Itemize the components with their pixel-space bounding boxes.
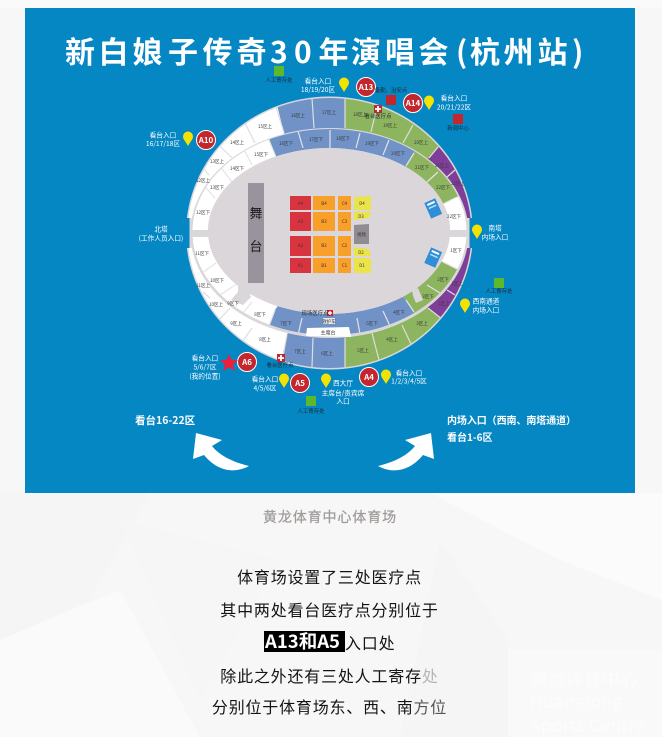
medical points <box>267 105 392 369</box>
watermark: 黄龙体育中心 <box>530 666 638 692</box>
stage <box>248 183 264 283</box>
floor seating blocks: A3 <box>298 219 304 225</box>
entrance labels: 看台入口 <box>305 76 331 86</box>
section labels: 7区下 <box>280 321 292 327</box>
entrance labels: 西大厅 <box>333 378 353 388</box>
floor seating blocks: B2 <box>321 243 327 249</box>
section labels: 18区下 <box>336 136 350 142</box>
entrance labels: (工作人员入口) <box>139 232 183 242</box>
icon: blue stands top <box>424 198 442 219</box>
section labels: 2区下 <box>437 277 449 283</box>
section labels: 20区上 <box>414 139 428 146</box>
section labels: 15区下 <box>254 152 268 158</box>
entrance labels: 看台入口 <box>441 92 467 102</box>
section labels: 16区下 <box>279 141 293 147</box>
floor seating blocks: A1 <box>298 263 304 269</box>
section labels: 21区下 <box>415 165 429 171</box>
section labels: 8区上 <box>259 336 271 343</box>
entrance labels: 入口 <box>336 396 350 406</box>
entrance labels: 18/19/20区 <box>301 84 335 94</box>
section labels: 6区上 <box>321 350 333 357</box>
callout: right <box>447 412 576 444</box>
body text: 入口处 <box>345 630 395 654</box>
section labels: 13区上 <box>210 158 224 165</box>
entrance labels: 1/2/3/4/5区 <box>391 376 427 386</box>
body text <box>212 564 447 718</box>
floor seating blocks: A4 <box>298 201 304 207</box>
service points <box>375 86 469 132</box>
floor seating blocks: 视频 <box>357 231 366 238</box>
entrance labels: 看台入口 <box>396 368 422 378</box>
entrance badges: A13 <box>358 82 374 93</box>
entrance labels: 看台入口 <box>192 352 218 362</box>
floor seating blocks: D1 <box>359 263 365 269</box>
section labels: 1区下 <box>450 248 462 254</box>
section labels: 3区下 <box>422 294 434 300</box>
section labels: 9区下 <box>227 301 239 307</box>
body text: A13和A5 <box>264 628 340 654</box>
section labels: 14区上 <box>230 139 244 146</box>
floor seating blocks: A2 <box>298 243 304 249</box>
section labels: 4区下 <box>393 310 405 316</box>
entrance labels: 南塔 <box>488 222 502 232</box>
section labels: 5区上 <box>357 347 369 354</box>
floor seating blocks: C4 <box>342 201 348 207</box>
section labels: 22区上 <box>451 180 465 187</box>
title: 新白娘子传奇30年演唱会(杭州站) <box>65 28 583 72</box>
body text: 其中两处看台医疗点分别位于 <box>220 597 439 621</box>
service points: 新闻中心 <box>447 124 469 132</box>
watermark: Huanglong <box>530 688 622 714</box>
entrance labels: 20/21/22区 <box>437 102 471 112</box>
entrance labels: 北塔 <box>154 224 168 234</box>
section labels: 5区下 <box>366 321 378 327</box>
section labels: 13区下 <box>210 185 224 191</box>
section labels: 11区下 <box>195 251 209 257</box>
entrance labels: 主席台/贵宾席 <box>322 388 365 398</box>
entrance labels: 4/5/6区 <box>253 382 277 392</box>
entrance labels: (我的位置) <box>189 370 221 380</box>
section labels: 9区上 <box>230 320 242 327</box>
upper tier <box>188 98 471 368</box>
stage: 舞 <box>249 203 263 222</box>
main stand: 主席台 <box>320 330 336 336</box>
medical points: 救护车 <box>322 318 336 325</box>
section labels: 12区上 <box>196 177 210 184</box>
section labels: 2区上 <box>438 300 450 307</box>
section labels: 19区上 <box>383 122 397 129</box>
stage: 台 <box>249 236 263 255</box>
entrance labels: 内场入口 <box>482 232 508 242</box>
main stand <box>306 327 351 337</box>
section labels: 1区上 <box>451 280 463 287</box>
floor seating blocks: B1 <box>321 263 327 269</box>
lower tier <box>192 129 466 334</box>
storage points: 人工寄存处 <box>298 407 325 415</box>
section labels: 15区上 <box>258 123 272 130</box>
section labels: 4区上 <box>386 336 398 343</box>
section labels: 10区下 <box>210 278 224 284</box>
callout: left: 看台16-22区 <box>135 413 196 428</box>
floor seating blocks: C1 <box>342 263 348 269</box>
callout: right: 内场入口（西南、南塔通道） <box>447 412 576 427</box>
section labels: 19区下 <box>365 141 379 147</box>
callout: right: 看台1-6区 <box>447 429 492 444</box>
medical points: 看台医疗点 <box>365 112 392 120</box>
stadium seating plan <box>186 96 472 370</box>
entrance badges: A10 <box>198 135 214 146</box>
panel: stadium map <box>25 8 635 493</box>
section labels: 10区上 <box>209 301 223 308</box>
section labels: 3区上 <box>416 320 428 327</box>
arrow: left <box>193 433 249 470</box>
floor seating blocks <box>290 196 371 273</box>
medical points: 现场医疗点 <box>302 309 329 317</box>
floor seating blocks: B4 <box>321 201 327 207</box>
section labels: 16区上 <box>291 112 305 119</box>
entrance badges <box>196 78 422 392</box>
section labels: 22区下 <box>436 185 450 191</box>
body text: 分别位于体育场东、西、南方位 <box>212 694 447 718</box>
entrance labels: 16/17/18区 <box>146 138 180 148</box>
section labels: 12区下 <box>196 210 210 216</box>
entrance badges: A14 <box>405 98 421 109</box>
section labels: 17区上 <box>322 109 336 116</box>
section labels: 8区下 <box>254 312 266 318</box>
floor seating blocks: D4 <box>359 201 365 207</box>
section labels: 18区上 <box>353 111 367 118</box>
storage points: 人工寄存处 <box>486 287 513 295</box>
floor seating blocks: D3 <box>358 214 364 220</box>
entrance labels: 看台入口 <box>252 374 278 384</box>
floor seating blocks: D2 <box>358 250 364 256</box>
storage points: 人工寄存处 <box>266 76 293 84</box>
section labels: 21区上 <box>435 162 449 169</box>
body text: 体育场设置了三处医疗点 <box>237 564 422 588</box>
section labels <box>195 109 465 357</box>
pins <box>183 78 482 388</box>
section labels: 14区下 <box>230 166 244 172</box>
entrance badges: A6 <box>241 357 252 368</box>
caption: 黄龙体育中心体育场 <box>263 507 397 527</box>
icon: my location star <box>220 354 238 371</box>
section labels: 22区下 <box>447 214 461 220</box>
entrance labels <box>139 76 508 406</box>
section labels: 17区下 <box>309 137 323 143</box>
entrance badges: A5 <box>294 378 305 389</box>
floor seating blocks: C3 <box>342 219 348 225</box>
body text: 除此之外还有三处人工寄存处 <box>220 663 439 687</box>
icon: blue stands bottom <box>424 247 442 268</box>
watermark <box>530 666 645 737</box>
medical points: 看台医疗点 <box>267 361 294 369</box>
entrance labels: 看台入口 <box>150 130 176 140</box>
north and south gaps <box>180 218 479 248</box>
floor seating blocks: B3 <box>321 219 327 225</box>
arrow: right <box>378 433 434 470</box>
field <box>208 148 450 314</box>
entrance badges: A4 <box>363 372 374 383</box>
entrance labels: 5/6/7区 <box>193 362 217 372</box>
section labels: 7区上 <box>294 348 306 355</box>
section labels: 20区下 <box>391 151 405 157</box>
entrance labels: 西南通道 <box>473 296 500 306</box>
section labels: 11区上 <box>196 282 210 289</box>
service points: 备勤、治安点 <box>375 86 408 94</box>
floor seating blocks: C2 <box>342 243 348 249</box>
entrance labels: 内场入口 <box>473 304 499 314</box>
storage points <box>266 66 513 415</box>
